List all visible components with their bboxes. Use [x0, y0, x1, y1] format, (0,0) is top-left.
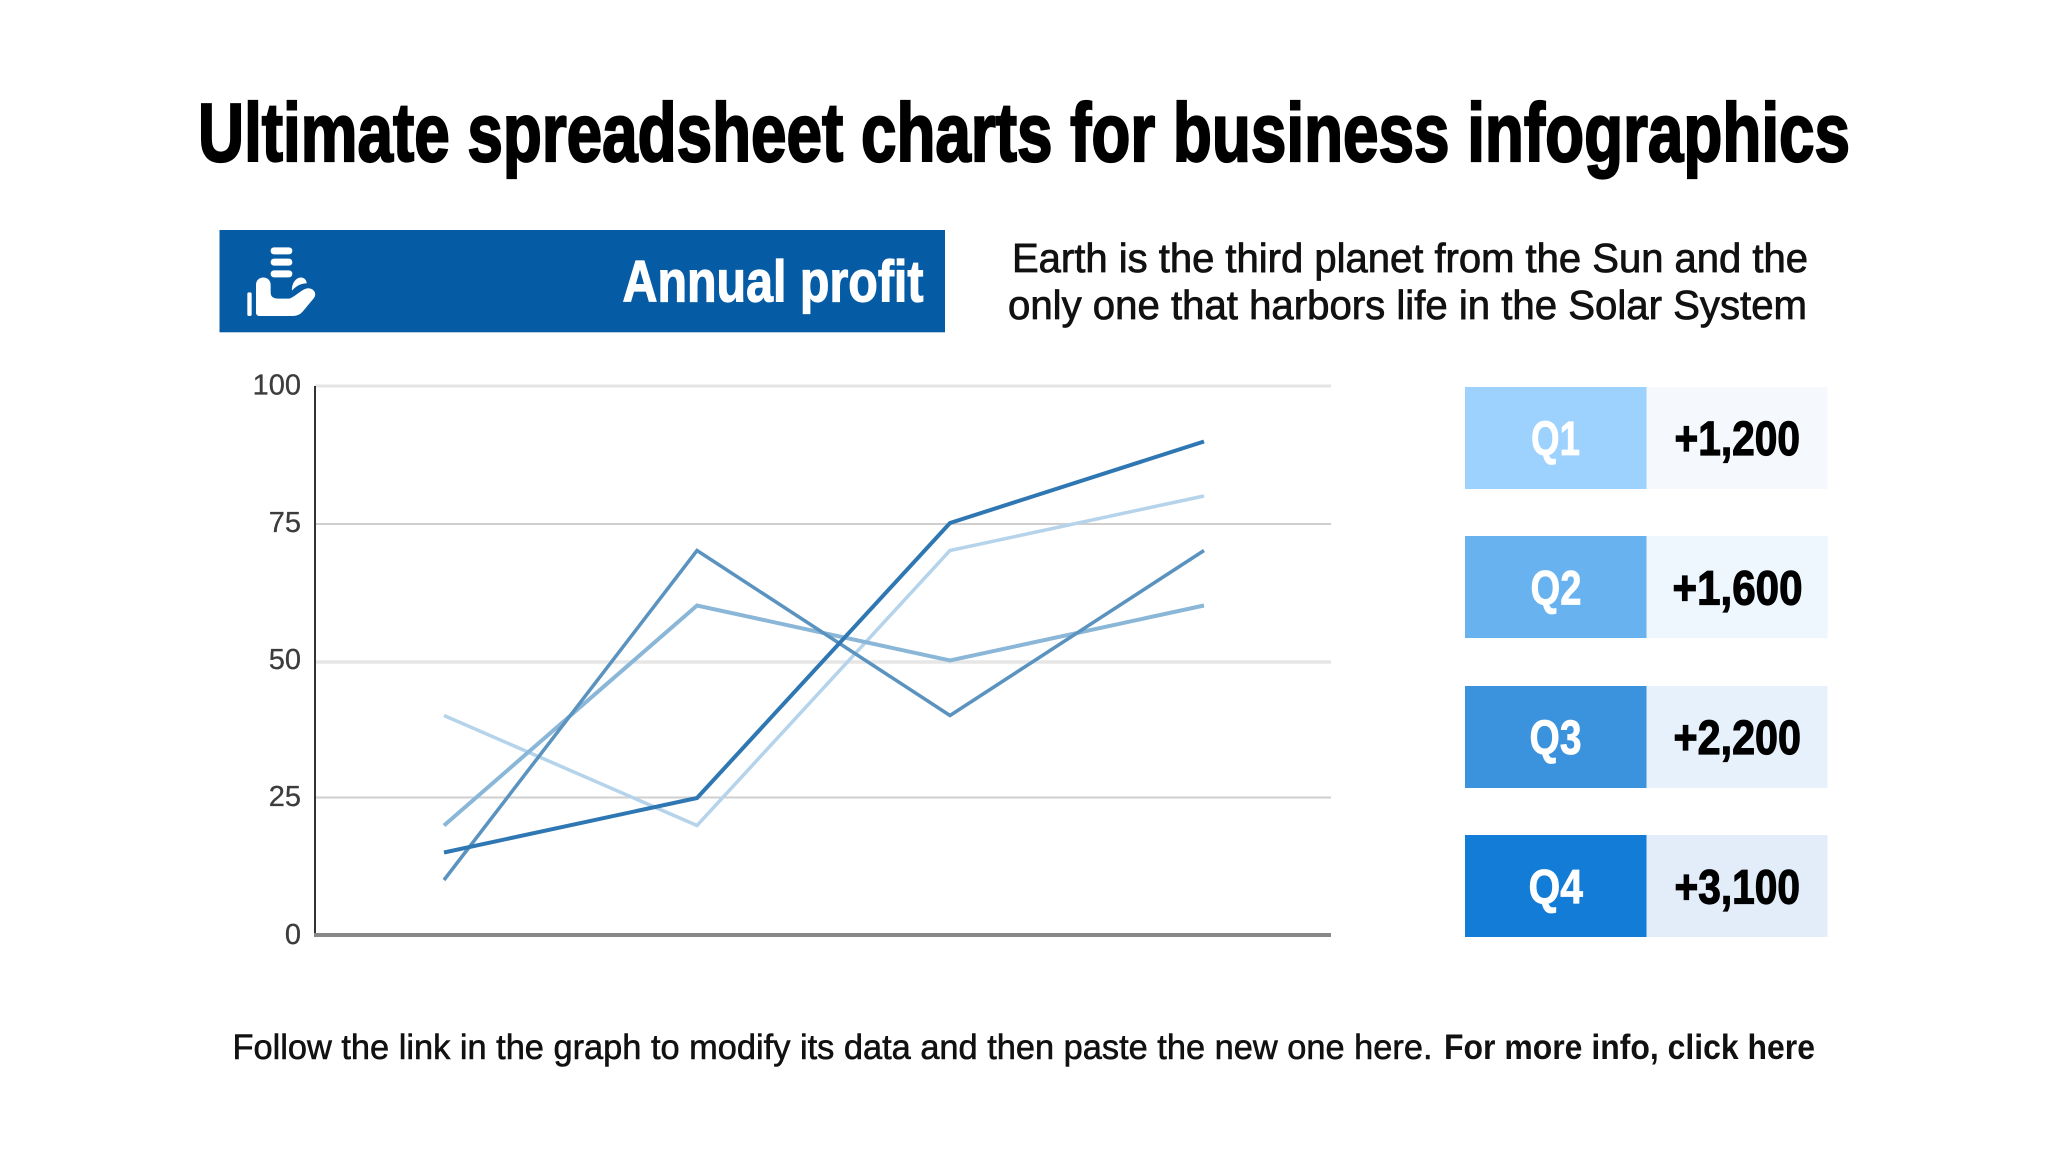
panel: Q3: Q3 — [1530, 712, 1582, 765]
y axis labels: 0 — [285, 919, 301, 951]
y axis labels: 25 — [269, 781, 301, 813]
panel: Q3 — [1465, 686, 1828, 788]
text block: description: only one that harbors life in the Solar System — [1008, 282, 1807, 328]
series: dark — [444, 442, 1204, 852]
panel: Q4: +3,100 — [1674, 862, 1800, 914]
panel: Q1: +1,200 — [1674, 413, 1800, 466]
panel: Q2 — [1465, 536, 1828, 638]
panel: Q4 — [1465, 835, 1828, 937]
series: light — [444, 606, 1204, 826]
y axis labels — [253, 370, 301, 951]
footer text: Follow the link in the graph to modify its data and then paste the new one here. — [232, 1028, 1432, 1067]
footer text: For more info, click here — [1444, 1028, 1815, 1067]
panel: Q1: Q1 — [1531, 413, 1580, 466]
panel: Q1 — [1465, 387, 1828, 489]
panel: Q3: +2,200 — [1674, 712, 1801, 765]
panel: Q2: Q2 — [1530, 562, 1582, 616]
y axis labels: 50 — [269, 644, 301, 676]
line chart — [253, 370, 1331, 951]
text block: description: Earth is the third planet from the Sun and the — [1012, 235, 1808, 281]
icon: hand holding coins — [247, 247, 315, 316]
panel: Q4: Q4 — [1528, 862, 1583, 914]
series: medium — [444, 550, 1204, 880]
panel: annual profit banner — [220, 230, 945, 332]
series: lightest — [444, 496, 1204, 826]
panel: Q2: +1,600 — [1672, 562, 1802, 616]
text block: description — [1008, 235, 1808, 328]
banner heading: Annual profit — [622, 250, 924, 314]
y axis labels: 75 — [269, 507, 301, 539]
y axis labels: 100 — [253, 370, 301, 402]
